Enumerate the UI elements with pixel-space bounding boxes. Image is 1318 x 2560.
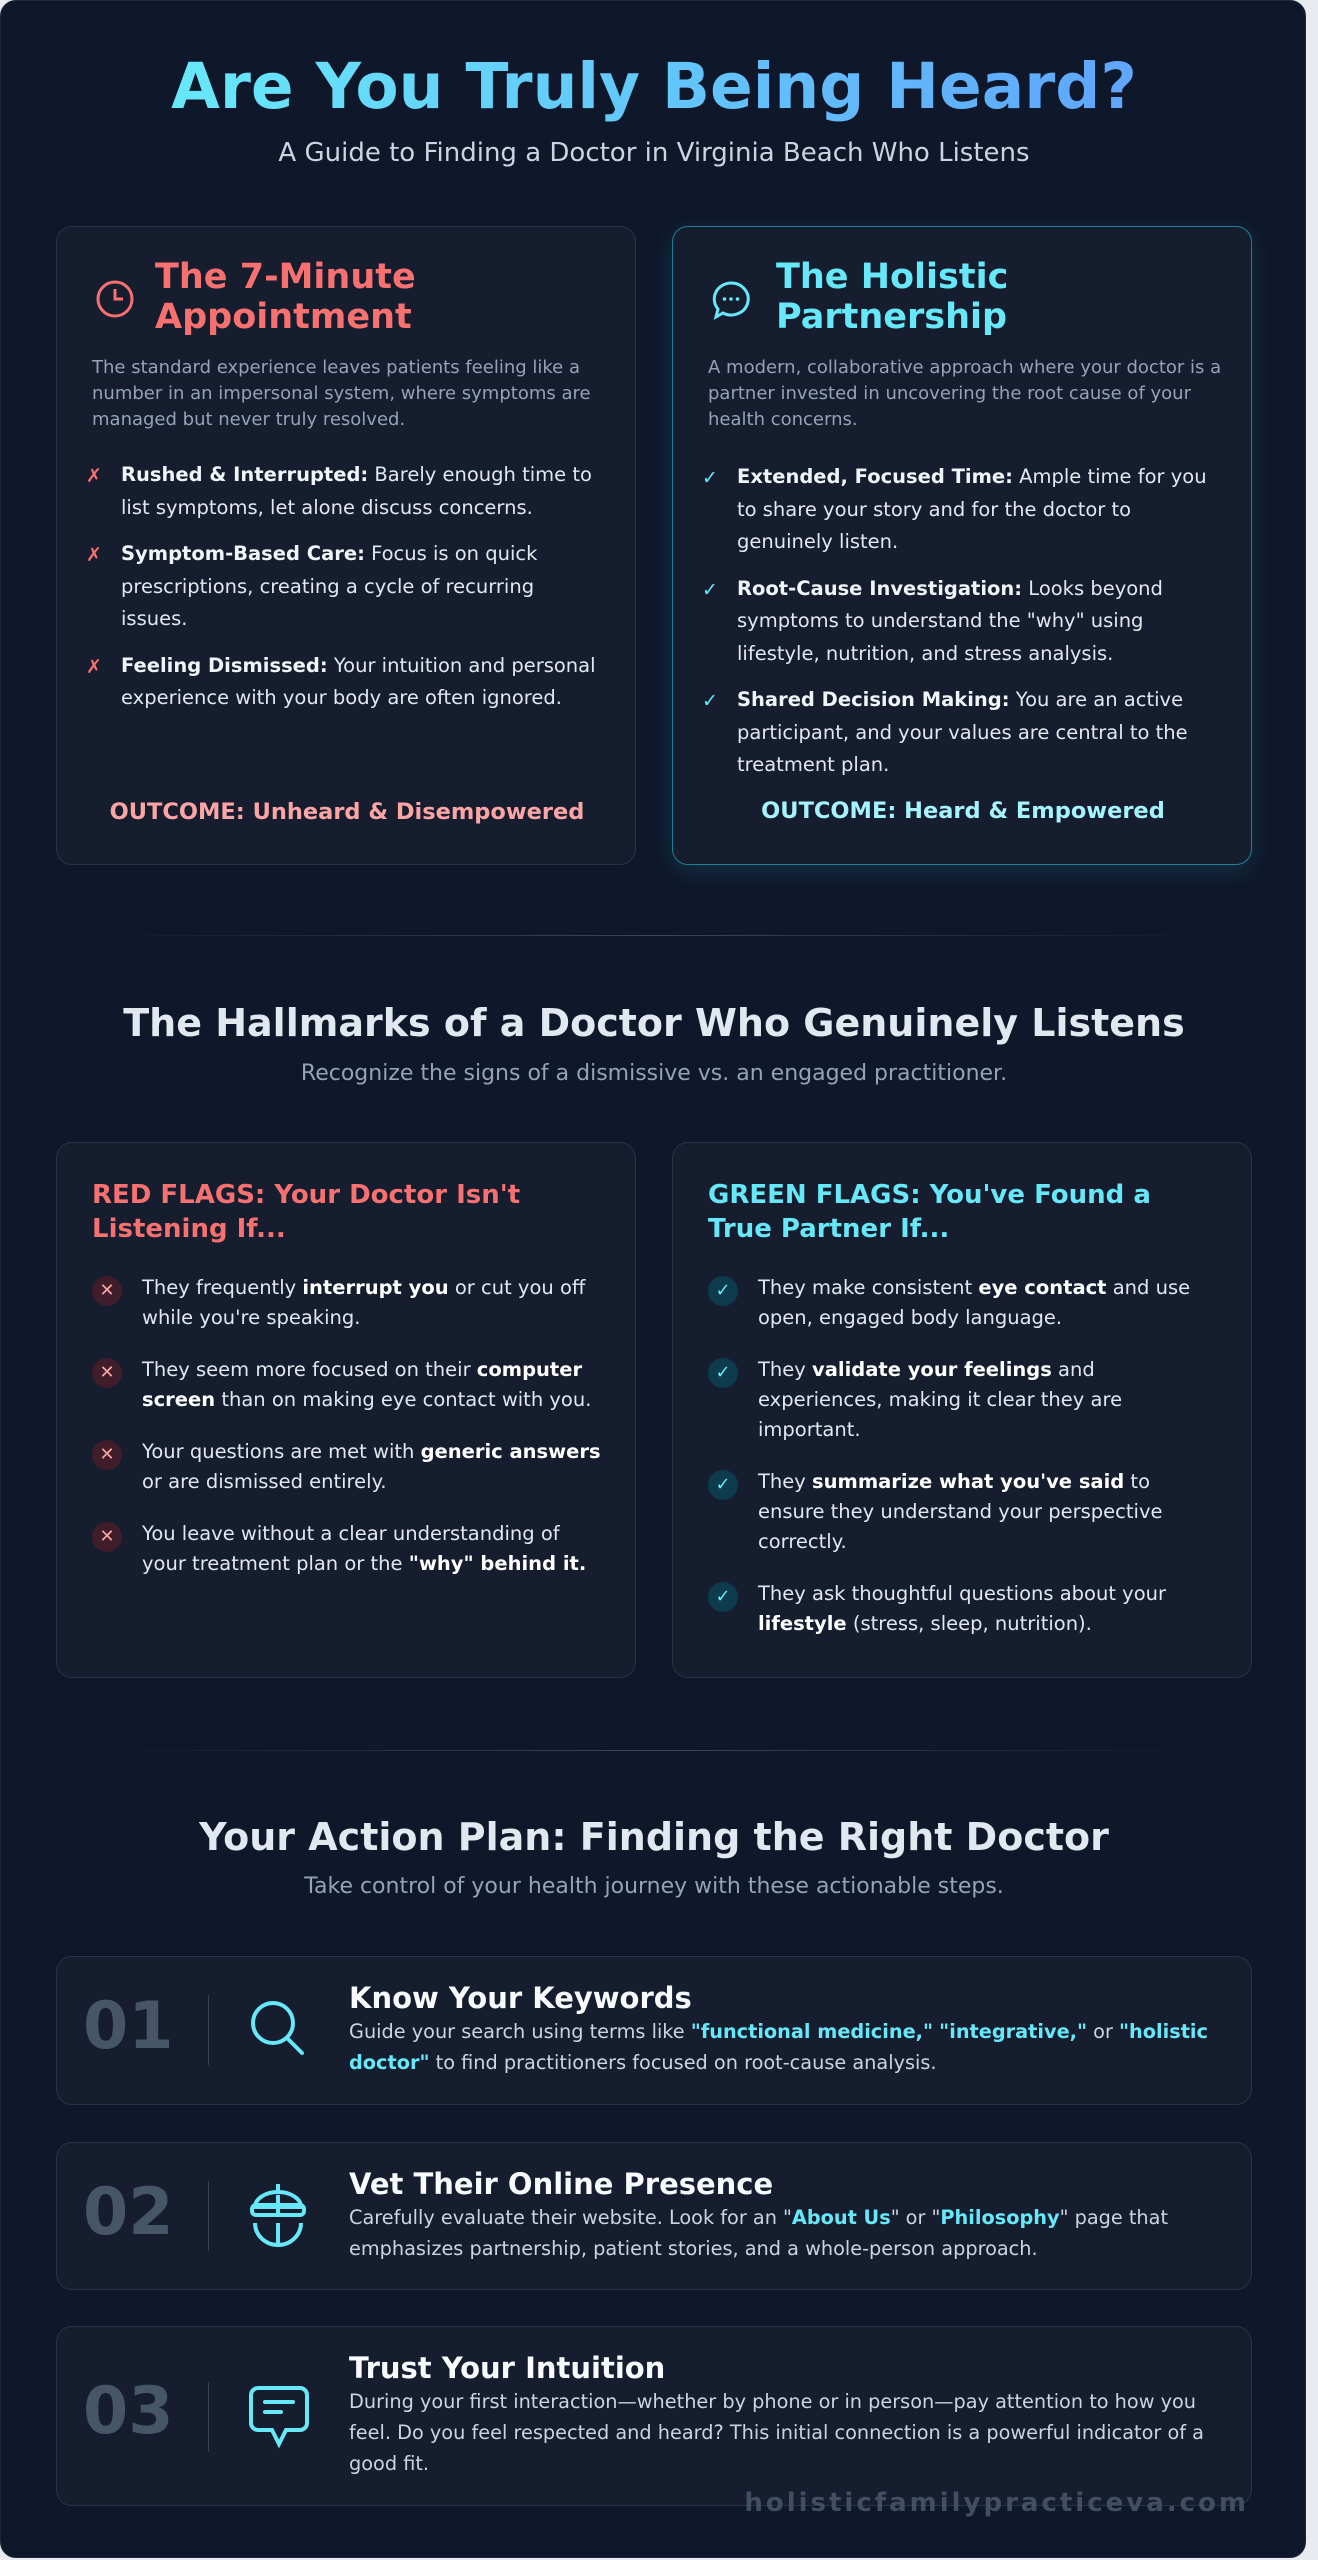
bullet list: [86, 463, 596, 709]
heading: [155, 257, 416, 337]
list: ✓: [715, 1586, 731, 1607]
list: [92, 1276, 601, 1575]
heading: The Holistic: [776, 257, 1008, 297]
panel: 7-minute appointment: [56, 226, 636, 865]
section subtitle: Take control of your health journey with these actionable steps.: [304, 1874, 1004, 1899]
bullet list: ✓: [702, 578, 718, 600]
list: They seem more focused on their computer screen than on making eye contact with you.: [142, 1358, 591, 1411]
title: Are You Truly Being Heard?: [171, 50, 1137, 123]
list: They make consistent eye contact and use open, engaged body language.: [758, 1276, 1190, 1329]
step 2: [56, 2142, 1252, 2290]
number: 01: [83, 1989, 173, 2064]
section heading: hallmarks: The Hallmarks of a Doctor Who Genuinely Listens: [123, 1001, 1185, 1045]
text: Trust Your Intuition: [349, 2351, 665, 2385]
outcome: OUTCOME: Unheard & Disempowered: [110, 799, 584, 825]
step 1: [56, 1956, 1252, 2105]
bullet list: ✗: [86, 544, 102, 566]
description: A modern, collaborative approach where your doctor is a partner invested in uncovering the root cause of your health concerns.: [708, 357, 1221, 430]
icon: search: [251, 2001, 304, 2056]
panel: green flags: [672, 1142, 1252, 1678]
text: Vet Their Online Presence: [349, 2167, 773, 2201]
list: They ask thoughtful questions about your lifestyle (stress, sleep, nutrition).: [758, 1582, 1166, 1635]
bullet list: ✗: [86, 656, 102, 678]
section subtitle: Recognize the signs of a dismissive vs. an engaged practitioner.: [301, 1061, 1007, 1086]
icon: message: [249, 2386, 309, 2448]
bullet list: Root-Cause Investigation: Looks beyond symptoms to understand the "why" using lifestyle, nutrition, and stress analysis.: [737, 576, 1163, 664]
list: ✕: [99, 1280, 115, 1301]
bullet list: Symptom-Based Care: Focus is on quick prescriptions, creating a cycle of recurring issues.: [121, 542, 537, 630]
icon: website: [250, 2184, 306, 2247]
text: Guide your search using terms like "functional medicine," "integrative," or "holistic doctor" to find practitioners focused on root-cause analysis.: [349, 2020, 1208, 2074]
outcome: OUTCOME: Heard & Empowered: [761, 798, 1165, 824]
bullet list: ✓: [702, 690, 718, 712]
icon: chat: [712, 282, 750, 320]
list: [708, 1276, 1190, 1635]
bullet list: Extended, Focused Time: Ample time for you to share your story and for the doctor to genuinely listen.: [737, 465, 1207, 553]
heading: Appointment: [155, 297, 412, 337]
text: [349, 2351, 1204, 2475]
heading: The 7-Minute: [155, 257, 416, 297]
bullet list: ✗: [86, 465, 102, 487]
bullet list: Rushed & Interrupted: Barely enough time to list symptoms, let alone discuss concerns.: [121, 463, 592, 518]
heading: GREEN FLAGS: You've Found a True Partner If...: [708, 1180, 1151, 1244]
list: ✕: [99, 1526, 115, 1547]
bullet list: Feeling Dismissed: Your intuition and personal experience with your body are often ignored.: [121, 654, 596, 709]
section heading: action plan: Your Action Plan: Finding the Right Doctor: [199, 1815, 1109, 1859]
bullet list: ✓: [702, 467, 718, 489]
step 3: [56, 2326, 1252, 2506]
heading: RED FLAGS: Your Doctor Isn't Listening If...: [92, 1180, 520, 1244]
list: ✓: [715, 1362, 731, 1383]
number: 03: [83, 2374, 173, 2449]
panel: holistic partnership: [672, 226, 1252, 865]
icon: clock: [96, 280, 134, 318]
list: ✓: [715, 1474, 731, 1495]
subtitle: A Guide to Finding a Doctor in Virginia Beach Who Listens: [278, 138, 1030, 168]
bullet list: [702, 465, 1207, 776]
list: ✕: [99, 1362, 115, 1383]
description: The standard experience leaves patients feeling like a number in an impersonal system, where symptoms are managed but never truly resolved.: [92, 357, 591, 430]
list: They summarize what you've said to ensure they understand your perspective correctly.: [758, 1470, 1162, 1553]
text: Carefully evaluate their website. Look for an "About Us" or "Philosophy" page that emphasizes partnership, patient stories, and a whole-person approach.: [349, 2206, 1168, 2260]
heading: Partnership: [776, 297, 1007, 337]
bullet list: Shared Decision Making: You are an active participant, and your values are central to the treatment plan.: [737, 688, 1188, 776]
heading: [776, 257, 1008, 337]
list: ✕: [99, 1444, 115, 1465]
text: During your first interaction—whether by phone or in person—pay attention to how you feel. Do you feel respected and heard? This initial connection is a powerful indicator of a good fit.: [349, 2390, 1204, 2475]
list: your treatment plan or the "why" behind it.: [142, 1552, 586, 1575]
panel: red flags: [56, 1142, 636, 1678]
list: They validate your feelings and experiences, making it clear they are important.: [758, 1358, 1122, 1441]
text: Know Your Keywords: [349, 1981, 692, 2015]
number: 02: [83, 2175, 173, 2250]
footer watermark: holisticfamilypracticeva.com: [744, 2488, 1249, 2518]
list: They frequently interrupt you or cut you off while you're speaking.: [142, 1276, 585, 1329]
list: Your questions are met with generic answers or are dismissed entirely.: [142, 1440, 601, 1493]
list: ✓: [715, 1280, 731, 1301]
text: [349, 1981, 1208, 2074]
text: [349, 2167, 1168, 2260]
list: You leave without a clear understanding of: [142, 1522, 560, 1545]
